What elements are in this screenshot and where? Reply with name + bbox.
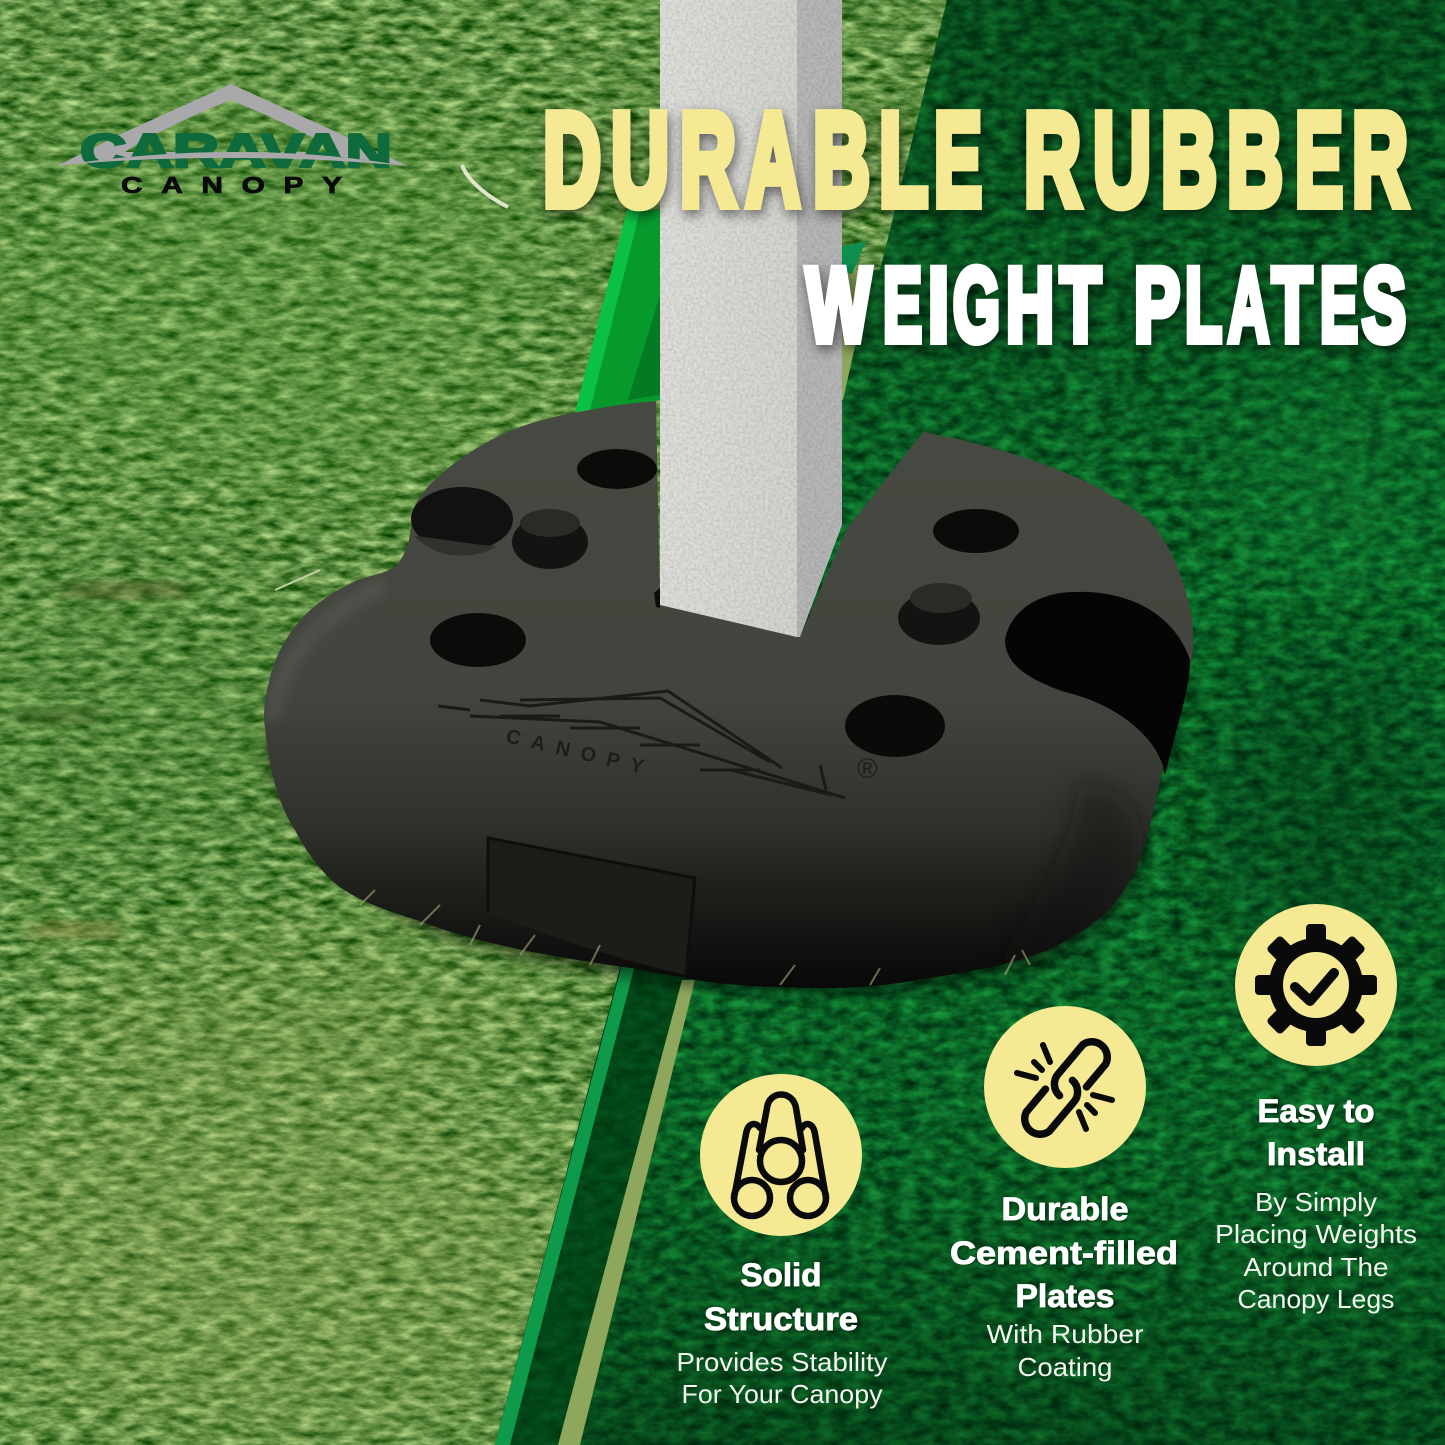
title line two: G (953, 247, 1000, 364)
title line two: A (1228, 247, 1269, 364)
description: Canopy Legs (1238, 1284, 1394, 1314)
embossed logo on plate: CANOPY (504, 725, 657, 781)
plate shadow on ground (265, 607, 1187, 995)
hole top centre (577, 449, 657, 489)
title: Durable Rubber Weight Plates (543, 86, 1408, 364)
description: For Your Canopy (682, 1379, 882, 1409)
description: By Simply (1255, 1187, 1377, 1217)
logo roof (57, 84, 407, 166)
embossed logo on plate (438, 691, 878, 798)
heading: Solid (740, 1257, 822, 1293)
logo: Caravan Canopy (57, 84, 407, 198)
embossed logo on plate: ® (857, 753, 878, 784)
description: Around The (1244, 1252, 1388, 1282)
title line one: A (746, 86, 800, 233)
title line two: E (1320, 247, 1358, 364)
title line one: B (1161, 86, 1217, 233)
pole base recess (654, 588, 660, 608)
description: Placing Weights (1215, 1219, 1417, 1249)
title line one: U (611, 86, 669, 233)
title line one: E (1295, 86, 1343, 233)
feature: solid structure (676, 1074, 888, 1409)
panel: dark green turf diagonal (580, 0, 1445, 1445)
description: Provides Stability (676, 1347, 888, 1377)
grass tufts over plate base (360, 890, 1030, 985)
title line two (806, 247, 1406, 364)
title line one: B (1227, 86, 1283, 233)
logo swoosh (57, 152, 407, 166)
heading: Easy to (1258, 1093, 1374, 1129)
title line one: R (680, 86, 736, 233)
heading: Plates (1016, 1278, 1114, 1314)
title line two: I (928, 247, 949, 364)
stripe: dark green band lower (495, 966, 690, 1445)
plate left rim highlight (272, 585, 385, 720)
canopy pole (660, 0, 842, 637)
heading: Install (1267, 1136, 1365, 1172)
heading: Structure (704, 1301, 858, 1337)
description: With Rubber (986, 1319, 1144, 1349)
hole right large (1005, 592, 1190, 775)
peg left (512, 509, 588, 569)
icon: pipes badge (700, 1074, 862, 1236)
hole left lower (430, 613, 526, 667)
title line two: S (1362, 247, 1406, 364)
front latch panel (488, 838, 695, 975)
title line two: E (883, 247, 922, 364)
heading: Durable (1002, 1191, 1128, 1227)
title line one: U (1093, 86, 1151, 233)
plate right side shading (990, 780, 1142, 975)
title line two: P (1134, 247, 1180, 364)
title line two: H (1006, 247, 1054, 364)
weight plate (264, 401, 1193, 995)
title line two: T (1060, 247, 1101, 364)
peg right (898, 583, 980, 645)
title line one: R (1352, 86, 1408, 233)
title line one: E (934, 86, 982, 233)
hole top right (933, 509, 1019, 553)
feature: durable cement-filled plates (950, 1006, 1178, 1382)
icon: gear check badge (1235, 904, 1397, 1066)
plate body (264, 401, 1193, 988)
title line two: W (806, 247, 871, 364)
title line one: D (543, 86, 601, 233)
logo wordmark CARAVAN: CARAVAN (80, 124, 392, 177)
stripe: upper left green wedge (575, 210, 660, 412)
hole right lower (845, 695, 945, 757)
logo wordmark CANOPY: CANOPY (121, 172, 342, 198)
title line one (543, 86, 1408, 233)
title line one: R (1024, 86, 1081, 233)
icon: chain badge (984, 1006, 1146, 1168)
hole left large (411, 487, 513, 556)
title line two: L (1185, 247, 1222, 364)
heading: Cement-filled (950, 1235, 1178, 1271)
stripe: upper right pale sliver and teal wedge (840, 241, 872, 400)
title line two: T (1272, 247, 1312, 364)
stripe: bright green edge lower (495, 965, 635, 1445)
stripe: pale grass lower (558, 980, 695, 1445)
description: Coating (1018, 1352, 1112, 1382)
title line one: B (813, 86, 870, 233)
title line one: L (879, 86, 928, 233)
feature: easy to install (1215, 904, 1417, 1314)
